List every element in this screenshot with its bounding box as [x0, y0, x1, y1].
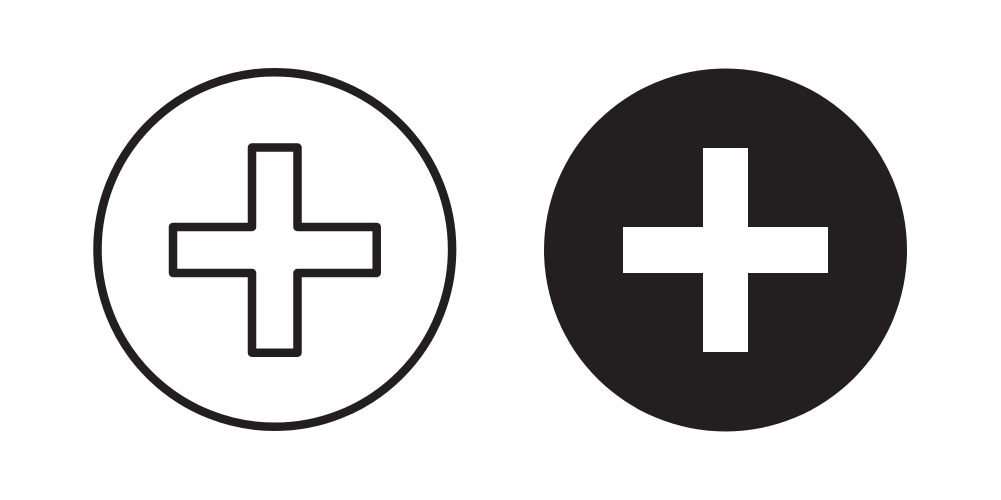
icon: filled circle with plus	[544, 68, 907, 432]
icon: outlined circle with plus	[97, 72, 452, 427]
